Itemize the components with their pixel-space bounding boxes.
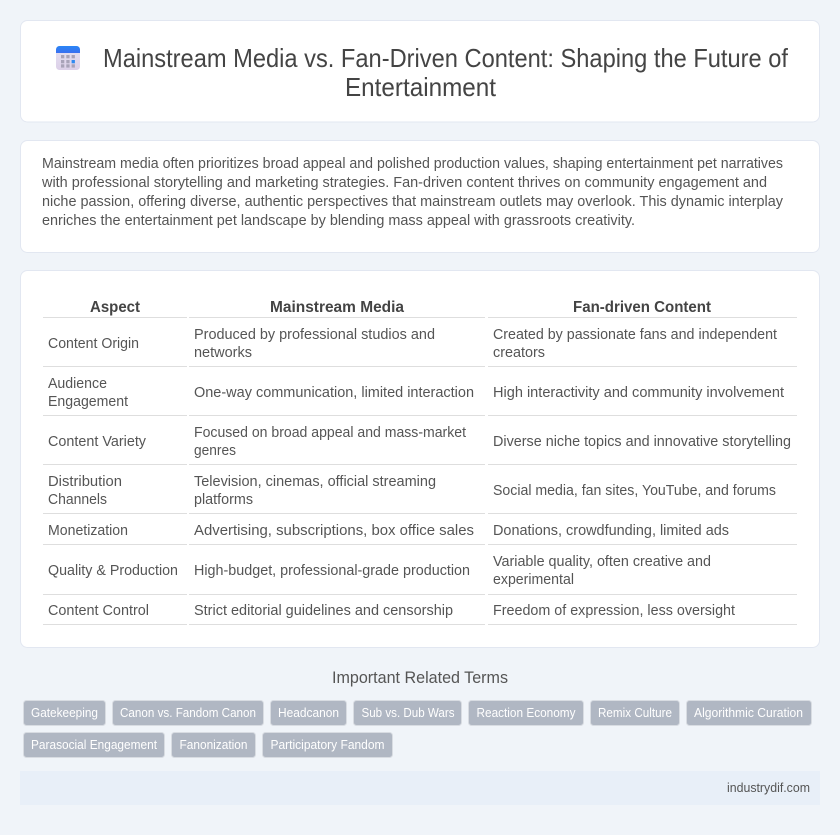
- tag: Fanonization: [180, 737, 248, 752]
- table header row: [90, 299, 712, 316]
- row: audience engagement: Audience: [48, 375, 107, 392]
- row: quality and production: High-budget, professional-grade production: [194, 562, 470, 579]
- row: distribution channels: [48, 473, 776, 508]
- panel: introduction paragraph: niche passion, offering diverse, authentic perspectives that mainstream outlets may overlook. This dynamic interplay: [42, 193, 783, 210]
- panel: introduction paragraph: enriches the entertainment pet landscape by blending mass appeal with grassroots creativity.: [42, 212, 635, 229]
- row: content variety: Diverse niche topics and innovative storytelling: [493, 433, 791, 450]
- heading: important related terms: Important Related Terms: [332, 668, 508, 687]
- row: content origin: Created by passionate fans and independent: [493, 326, 778, 343]
- row: quality and production: Quality & Production: [48, 562, 178, 579]
- row: quality and production: experimental: [493, 571, 574, 588]
- row: distribution channels: Television, cinemas, official streaming: [194, 473, 436, 490]
- tag: Reaction Economy: [476, 705, 576, 720]
- tag: Parasocial Engagement: [31, 737, 157, 752]
- table header row: Fan-driven Content: [573, 299, 712, 316]
- tag: Headcanon: [278, 705, 339, 720]
- related term tags: [24, 700, 812, 758]
- row: distribution channels: Distribution: [48, 473, 122, 490]
- row: content variety: Content Variety: [48, 433, 146, 450]
- panel: introduction paragraph: with professional storytelling and marketing strategies. Fan-driven content thrives on community engagement and: [41, 174, 767, 191]
- tag: [172, 732, 256, 758]
- tag: [24, 732, 164, 758]
- title: Mainstream Media vs. Fan-Driven Content: Shaping the Future of: [103, 43, 789, 73]
- title: Entertainment: [345, 72, 497, 102]
- row: quality and production: [48, 553, 711, 588]
- row: content control: Strict editorial guidelines and censorship: [194, 602, 453, 619]
- tag: Sub vs. Dub Wars: [362, 705, 455, 720]
- row: content control: Freedom of expression, less oversight: [493, 602, 736, 619]
- icon: calendar: [56, 46, 80, 70]
- row: content origin: creators: [493, 344, 545, 361]
- table header row: Aspect: [90, 299, 141, 316]
- row: monetization: Advertising, subscriptions, box office sales: [194, 522, 474, 539]
- title: [103, 43, 789, 102]
- tag: [262, 732, 392, 758]
- row: content origin: Content Origin: [48, 335, 139, 352]
- row: distribution channels: Channels: [48, 491, 107, 508]
- panel: introduction paragraph: Mainstream media often prioritizes broad appeal and polished production values, shaping entertainment pet narratives: [42, 155, 783, 172]
- row: distribution channels: Social media, fan sites, YouTube, and forums: [493, 482, 776, 499]
- panel: comparison table: [20, 270, 820, 648]
- tag: [270, 700, 346, 726]
- table header row: Mainstream Media: [270, 299, 404, 316]
- footer bar: industrydif.com: [727, 780, 810, 795]
- row: content origin: Produced by professional studios and: [194, 326, 435, 343]
- tag: [468, 700, 584, 726]
- tag: [354, 700, 462, 726]
- row: monetization: Monetization: [48, 522, 128, 539]
- panel: title card: [20, 20, 820, 122]
- tag: Remix Culture: [598, 705, 672, 720]
- tag: Canon vs. Fandom Canon: [120, 705, 256, 720]
- row: content variety: genres: [194, 442, 236, 459]
- row: distribution channels: platforms: [194, 491, 253, 508]
- row: content origin: [48, 326, 778, 361]
- row: quality and production: Variable quality, often creative and: [493, 553, 711, 570]
- tag: [590, 700, 680, 726]
- row: content origin: networks: [194, 344, 252, 361]
- row: monetization: Donations, crowdfunding, limited ads: [493, 522, 729, 539]
- panel: introduction paragraph: [20, 140, 820, 252]
- tag: Gatekeeping: [31, 705, 98, 720]
- tag: [24, 700, 106, 726]
- row: monetization: [48, 522, 729, 539]
- row: content variety: [48, 424, 791, 459]
- row: content variety: Focused on broad appeal and mass-market: [194, 424, 467, 441]
- row: audience engagement: One-way communication, limited interaction: [194, 384, 474, 401]
- row: content control: [48, 602, 736, 619]
- tag: [686, 700, 812, 726]
- row: content control: Content Control: [48, 602, 149, 619]
- row: audience engagement: High interactivity and community involvement: [493, 384, 785, 401]
- tag: [112, 700, 264, 726]
- row: audience engagement: Engagement: [48, 393, 129, 410]
- tag: Participatory Fandom: [270, 737, 384, 752]
- footer bar: [20, 771, 820, 805]
- row: audience engagement: [48, 375, 785, 410]
- tag: Algorithmic Curation: [694, 705, 803, 720]
